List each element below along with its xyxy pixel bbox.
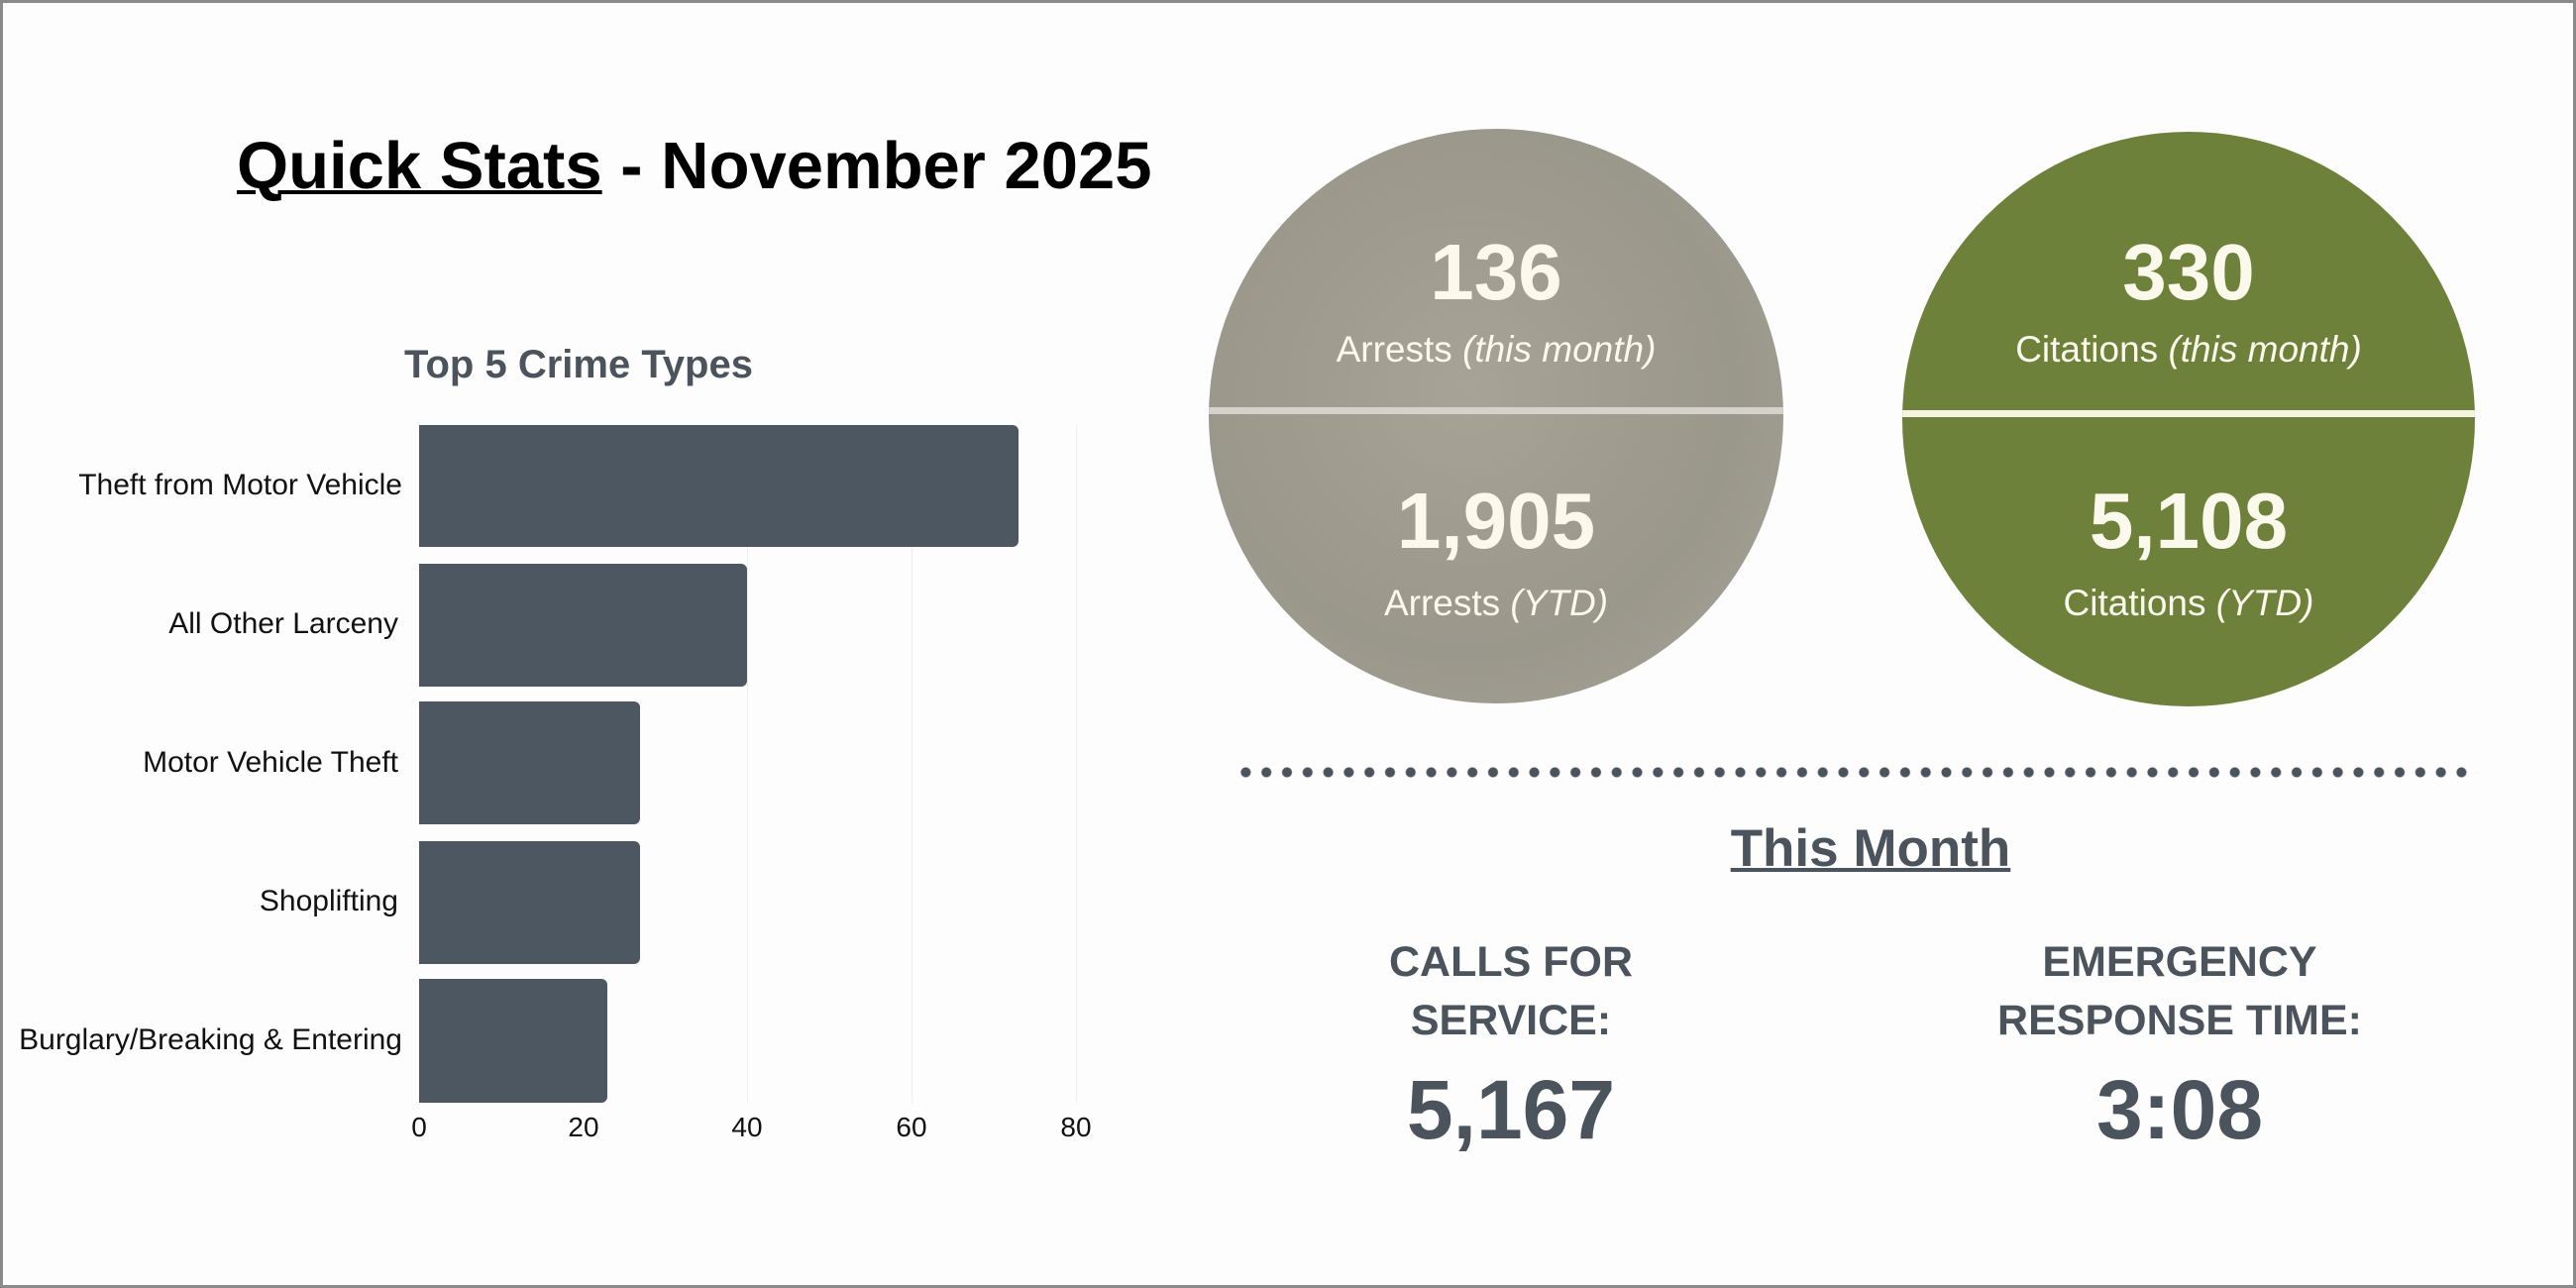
circle: citations: 5,108: [2090, 477, 2288, 565]
category labels: [19, 469, 402, 1056]
stat: emergency response time: [1997, 938, 2362, 1156]
circle: citations: Citations (YTD): [2064, 583, 2313, 623]
x-axis ticks: 80: [1060, 1112, 1092, 1142]
category labels: Theft from Motor Vehicle: [78, 469, 402, 501]
circle: arrests: Arrests (this month): [1337, 329, 1656, 370]
stat: emergency response time: RESPONSE TIME:: [1997, 997, 2362, 1044]
x-axis ticks: 40: [731, 1112, 763, 1142]
circle: arrests: [1209, 129, 1783, 703]
chart title: Top 5 Crime Types: [404, 343, 753, 386]
stat: calls for service: CALLS FOR: [1389, 938, 1633, 986]
bar: theft from motor vehicle: [419, 425, 1019, 547]
x-axis ticks: [411, 1112, 1092, 1142]
category labels: Motor Vehicle Theft: [143, 746, 398, 779]
bar: all other larceny: [419, 564, 747, 687]
stat: calls for service: 5,167: [1407, 1063, 1615, 1156]
category labels: Shoplifting: [260, 885, 398, 917]
bar: motor vehicle theft: [419, 701, 640, 824]
heading: this month: This Month: [1731, 819, 2010, 878]
circle: arrests: 136: [1430, 228, 1562, 316]
category labels: All Other Larceny: [168, 607, 398, 640]
stat: emergency response time: 3:08: [2096, 1063, 2263, 1156]
stat: calls for service: SERVICE:: [1411, 997, 1611, 1044]
circle: citations: Citations (this month): [2015, 329, 2362, 370]
stat: emergency response time: EMERGENCY: [2042, 938, 2317, 986]
category labels: Burglary/Breaking & Entering: [19, 1023, 402, 1056]
bar: shoplifting: [419, 841, 640, 964]
circle: citations: 330: [2122, 228, 2255, 316]
x-axis ticks: 20: [568, 1112, 599, 1142]
circle: citations: [1902, 132, 2475, 706]
circle: arrests: 1,905: [1397, 477, 1595, 565]
circle: arrests: Arrests (YTD): [1384, 583, 1608, 623]
title: Quick Stats - November 2025: [237, 129, 1152, 203]
chart: top 5 crime types: [19, 343, 1092, 1142]
bar: burglary: [419, 979, 607, 1103]
x-axis ticks: 60: [896, 1112, 927, 1142]
x-axis ticks: 0: [411, 1112, 427, 1142]
stat: calls for service: [1389, 938, 1633, 1156]
